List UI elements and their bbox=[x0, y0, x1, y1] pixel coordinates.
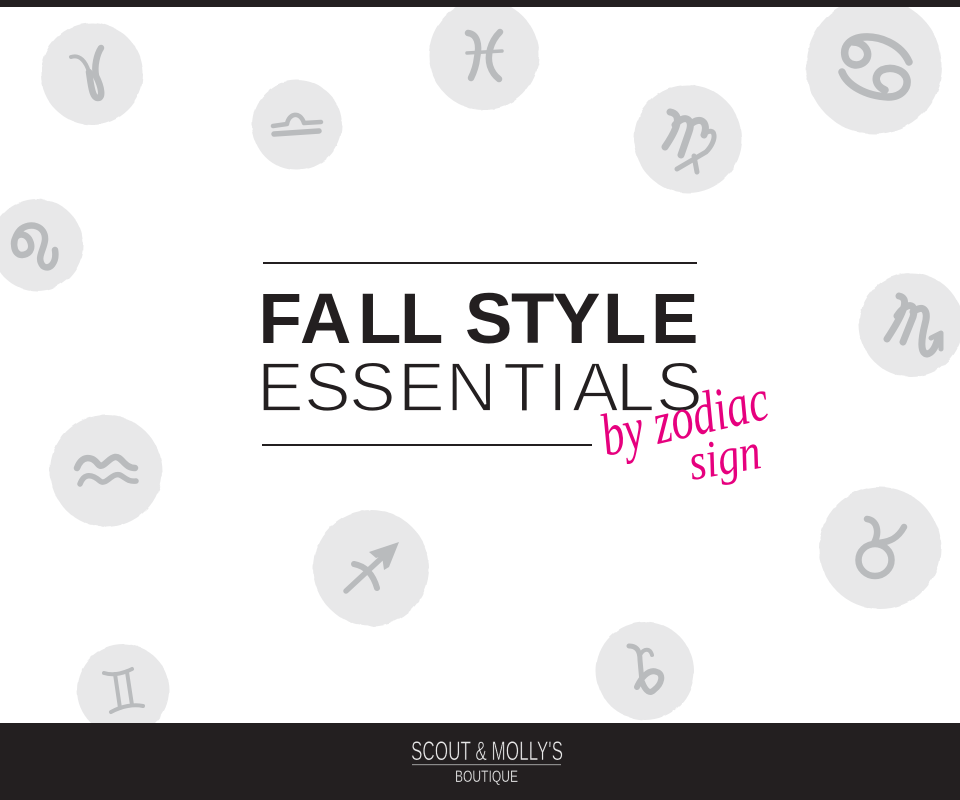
icon: pisces bbox=[429, 0, 539, 110]
footer logo: scout & molly's boutique: SCOUT & MOLLY'S bbox=[411, 736, 563, 766]
icon: capricorn bbox=[596, 622, 694, 720]
icon: gemini bbox=[77, 644, 169, 736]
icon: sagittarius bbox=[313, 510, 429, 626]
icon: taurus bbox=[819, 487, 941, 609]
icon: aries bbox=[41, 23, 143, 125]
icon: libra bbox=[252, 80, 342, 170]
top bar bbox=[0, 0, 960, 7]
script subtitle: by zodiac sign bbox=[594, 366, 775, 492]
script subtitle: by zodiac sign: by zodiac bbox=[594, 366, 775, 469]
icon: scorpio bbox=[859, 273, 960, 377]
icon: virgo bbox=[634, 85, 742, 193]
bottom rule bbox=[262, 444, 592, 446]
icon: leo bbox=[0, 199, 83, 291]
title: essentials: ESSENTIALS bbox=[257, 348, 703, 426]
footer bar bbox=[0, 723, 960, 800]
script subtitle: by zodiac sign: sign bbox=[684, 423, 765, 492]
icon: aquarius bbox=[50, 415, 162, 527]
top rule bbox=[263, 262, 697, 264]
footer logo: scout & molly's boutique: BOUTIQUE bbox=[455, 767, 518, 786]
footer logo: scout & molly's boutique bbox=[411, 736, 563, 786]
title: fall style: FALLSTYLE bbox=[258, 280, 698, 359]
icon: cancer bbox=[806, 0, 942, 134]
